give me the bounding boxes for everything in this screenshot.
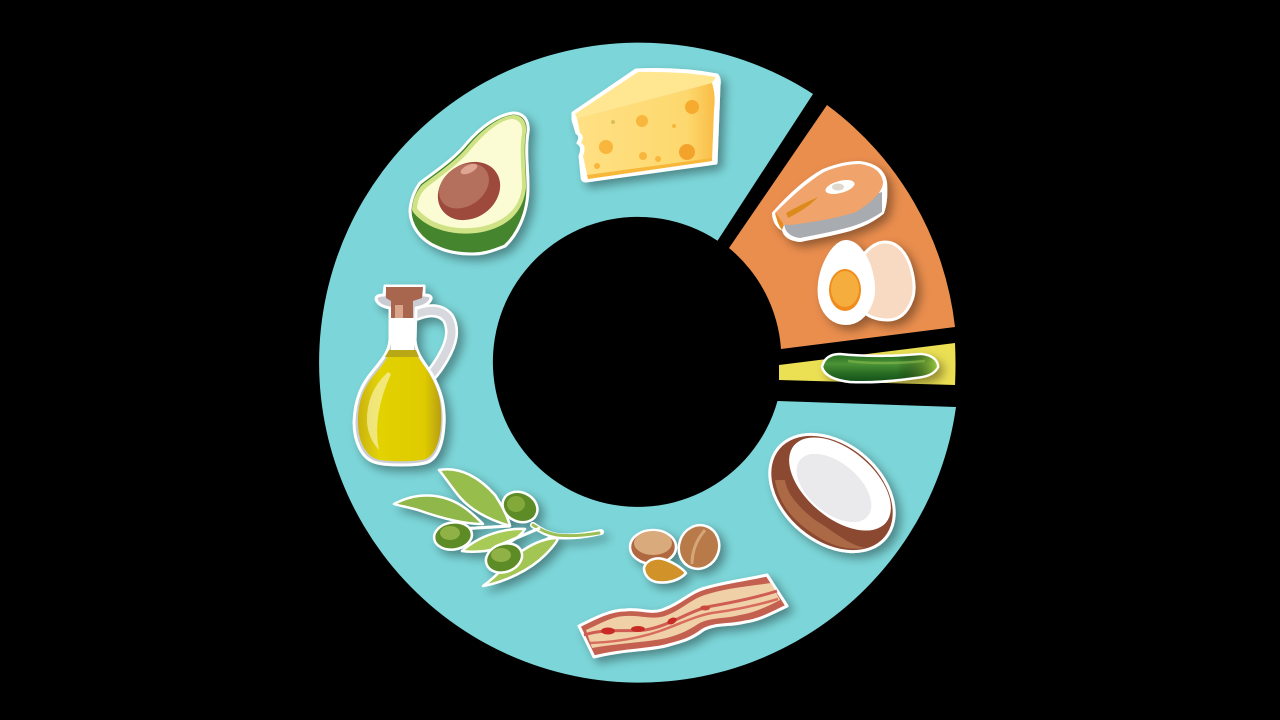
icon: salmon steak [773,162,886,241]
icon: coconut [747,410,917,576]
icon: avocado [410,113,528,254]
segment: protein (orange) [729,105,955,349]
icon: bacon [579,575,787,657]
segment: fats (teal, largest) [319,43,956,683]
icon: cucumber [822,354,938,382]
icon: eggs [819,241,914,324]
icon: cheese [573,70,719,181]
segment: carbohydrates (yellow) [779,343,956,385]
icon: olive branch [394,469,601,586]
icon: nuts [630,519,725,583]
icon: olive oil jug [354,286,452,465]
